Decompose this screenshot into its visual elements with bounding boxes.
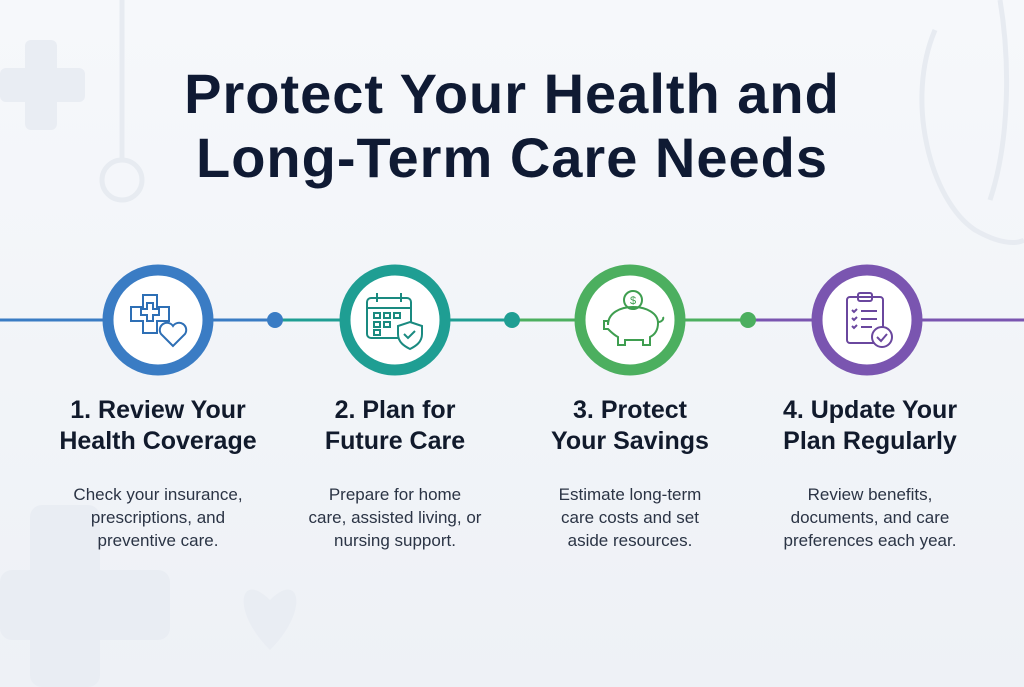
timeline bbox=[0, 264, 1024, 376]
step 2: Prepare for home bbox=[329, 485, 461, 504]
step 4: preferences each year. bbox=[784, 531, 956, 550]
step 1: 1. Review Your bbox=[70, 396, 246, 424]
icon: piggy bank bbox=[580, 270, 680, 370]
step 4: Review benefits, bbox=[808, 485, 932, 504]
step 1 bbox=[59, 396, 257, 550]
step 2 bbox=[309, 396, 482, 550]
step 1: Check your insurance, bbox=[73, 485, 243, 504]
icon: calendar shield bbox=[345, 270, 445, 370]
icon: piggy bank: $ bbox=[630, 295, 636, 307]
step 2: Future Care bbox=[325, 427, 465, 455]
step 4: 4. Update Your bbox=[783, 396, 957, 424]
step 3: care costs and set bbox=[561, 508, 699, 527]
step 2: 2. Plan for bbox=[335, 396, 455, 424]
icon: health coverage bbox=[108, 270, 208, 370]
step 1: preventive care. bbox=[98, 531, 218, 550]
title: Long-Term Care Needs bbox=[196, 126, 828, 189]
icon: clipboard bbox=[817, 270, 917, 370]
step 3: 3. Protect bbox=[573, 396, 687, 424]
step 4: Plan Regularly bbox=[783, 427, 957, 455]
step 3: Estimate long-term bbox=[559, 485, 701, 504]
step 1: prescriptions, and bbox=[91, 508, 225, 527]
title: Protect Your Health and bbox=[184, 62, 840, 125]
step 3 bbox=[551, 396, 709, 550]
step 4: documents, and care bbox=[791, 508, 949, 527]
step 2: nursing support. bbox=[334, 531, 456, 550]
title bbox=[184, 62, 840, 189]
step 3: Your Savings bbox=[551, 427, 709, 455]
step 2: care, assisted living, or bbox=[309, 508, 481, 527]
step 1: Health Coverage bbox=[59, 427, 257, 455]
step 3: aside resources. bbox=[568, 531, 692, 550]
step 4 bbox=[783, 396, 957, 550]
